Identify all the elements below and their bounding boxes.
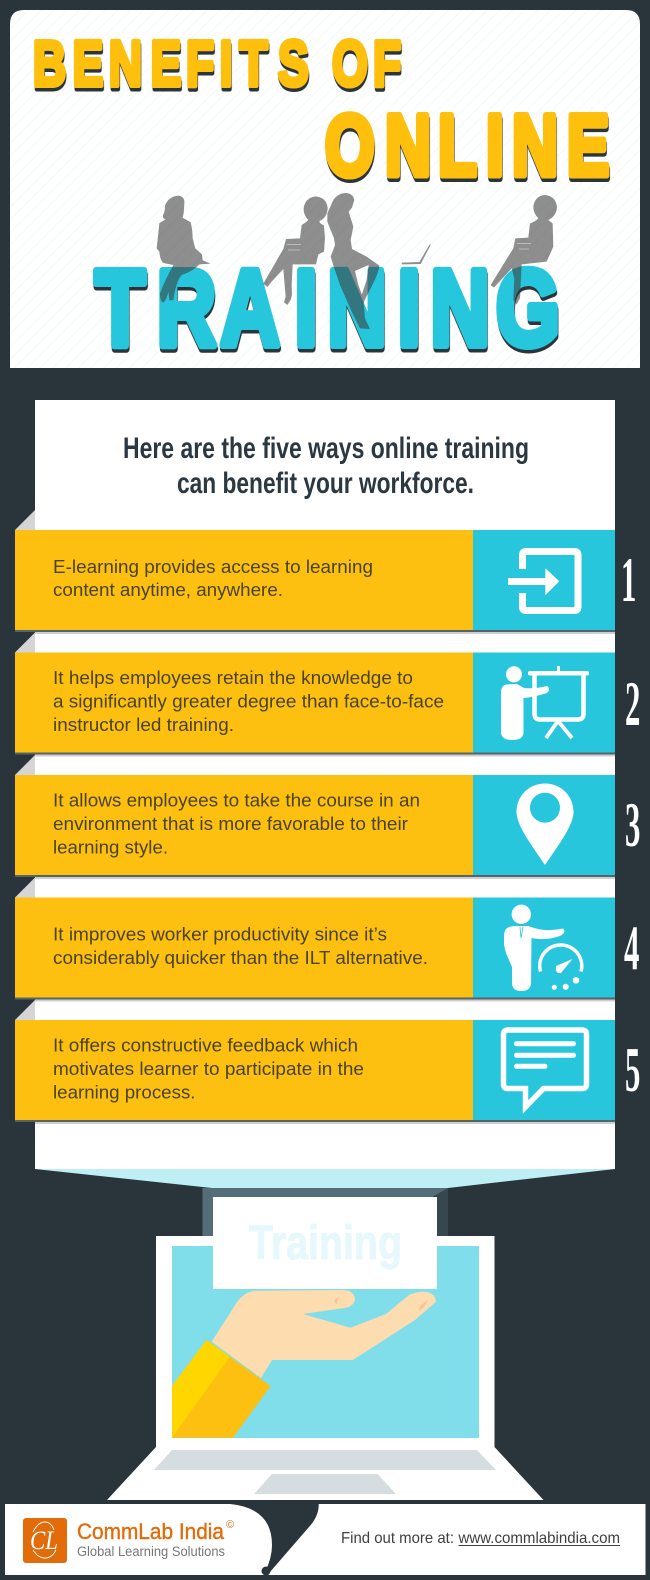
item 2 text: It helps employees retain the knowledge to bbox=[53, 667, 413, 688]
number 4: 4 bbox=[624, 912, 639, 983]
item 5 text: It offers constructive feedback which bbox=[53, 1034, 358, 1056]
silhouette: laptop on the letter bbox=[402, 244, 431, 264]
subtitle: can benefit your workforce. bbox=[177, 467, 474, 500]
laptop highlights on silhouettes bbox=[287, 244, 531, 250]
silhouette: woman in the centre bbox=[327, 193, 379, 329]
sleeve bbox=[172, 1340, 270, 1438]
silhouette: woman sitting bbox=[157, 196, 211, 303]
projection light beam bbox=[35, 1169, 615, 1188]
icon: speech bubble bbox=[504, 1030, 586, 1107]
item 1 text: content anytime, anywhere. bbox=[53, 579, 283, 600]
item 1 bbox=[15, 510, 636, 634]
silhouette: man with laptop bbox=[263, 196, 328, 305]
title: Benefits of: BENEFITS OF bbox=[33, 28, 401, 99]
item 3 text: learning style. bbox=[53, 836, 168, 858]
icon: location pin bbox=[516, 784, 574, 865]
footer bar bbox=[5, 1504, 646, 1576]
subtitle bbox=[123, 432, 529, 500]
item 4 bbox=[15, 878, 639, 1002]
copyright mark: © bbox=[226, 1519, 234, 1531]
number 2: 2 bbox=[625, 668, 640, 739]
item 5 text: motivates learner to participate in the bbox=[53, 1058, 364, 1079]
footer link: www.commlabindia.com bbox=[458, 1530, 620, 1547]
item 4 text: It improves worker productivity since it’s bbox=[53, 924, 387, 944]
item 2 text: instructor led training. bbox=[53, 714, 234, 735]
item 4 text bbox=[53, 924, 428, 968]
trackpad bbox=[254, 1474, 396, 1494]
content panel bbox=[35, 400, 615, 1169]
item 4 text: considerably quicker than the ILT alternative. bbox=[53, 947, 428, 968]
icon: presenter with gauge bbox=[504, 905, 582, 991]
icon: presenter with board bbox=[501, 666, 589, 740]
silhouettes of learners with laptops bbox=[157, 193, 557, 329]
paper card bbox=[213, 1197, 437, 1289]
footer call to action: Find out more at: bbox=[341, 1530, 454, 1547]
item 5 bbox=[15, 1000, 640, 1124]
item 3 bbox=[15, 755, 640, 879]
item 3 text: It allows employees to take the course in an bbox=[53, 790, 420, 810]
card label: Training: Training bbox=[249, 1217, 402, 1270]
item 5 text bbox=[53, 1034, 364, 1102]
item 3 text bbox=[53, 790, 420, 858]
footer notch bbox=[230, 1504, 319, 1572]
item 2 bbox=[15, 632, 640, 756]
title panel bbox=[10, 10, 640, 369]
keyboard bbox=[154, 1450, 496, 1470]
title: Online: ONLINE bbox=[325, 99, 609, 194]
item 5 text: learning process. bbox=[53, 1082, 196, 1102]
laptop illustration bbox=[107, 1188, 544, 1500]
laptop body bbox=[107, 1236, 544, 1500]
footer pin dot bbox=[262, 1566, 270, 1576]
subtitle: Here are the five ways online training bbox=[123, 432, 529, 465]
item 1 text: E-learning provides access to learning bbox=[53, 556, 373, 577]
hand bbox=[212, 1290, 436, 1378]
item 3 text: environment that is more favorable to their bbox=[53, 813, 408, 834]
number 5: 5 bbox=[625, 1034, 640, 1105]
logo mark: CL bbox=[30, 1526, 58, 1555]
item 2 text: a significantly greater degree than face-to-face bbox=[53, 690, 444, 712]
logo mark bbox=[23, 1518, 67, 1563]
laptop lid back bbox=[202, 1188, 448, 1236]
item 2 text bbox=[53, 667, 444, 735]
item 1 text bbox=[53, 556, 373, 600]
title: Training: TRAINING bbox=[95, 248, 560, 369]
silhouette: man with laptop at right bbox=[491, 195, 557, 304]
number 1: 1 bbox=[621, 544, 636, 615]
number 3: 3 bbox=[625, 789, 640, 860]
icon: enter arrow bbox=[508, 552, 578, 610]
laptop screen bbox=[172, 1246, 479, 1438]
logo tagline: Global Learning Solutions bbox=[77, 1544, 225, 1559]
logo name: CommLab India bbox=[77, 1519, 225, 1544]
